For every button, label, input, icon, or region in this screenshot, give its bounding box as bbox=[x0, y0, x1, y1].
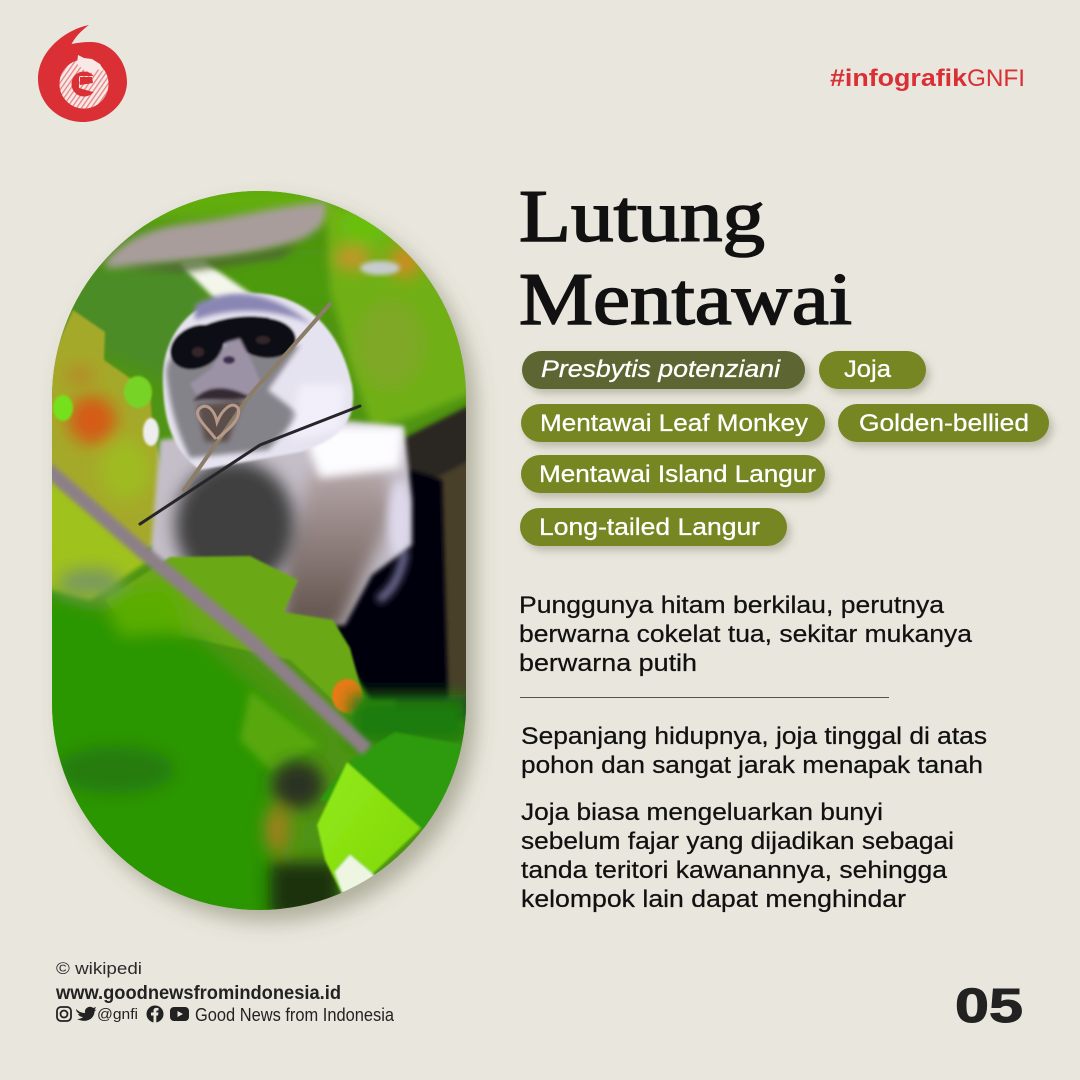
pill: scientific name bbox=[522, 351, 805, 389]
bright leaf bbox=[317, 762, 421, 900]
page number: 05 bbox=[955, 980, 1023, 1033]
photo credit: © wikipedi bbox=[56, 959, 142, 978]
description paragraph 3: kelompok lain dapat menghindar bbox=[521, 886, 906, 913]
monkey head bbox=[163, 293, 353, 470]
icon: facebook bbox=[146, 1006, 164, 1023]
photo background foliage bbox=[63, 191, 379, 392]
right dark trunk bbox=[395, 405, 470, 720]
pill: Joja bbox=[819, 351, 926, 389]
thin twigs bbox=[140, 304, 360, 524]
icon: youtube bbox=[170, 1007, 189, 1021]
white streak bbox=[180, 262, 254, 306]
pill: Mentawai Island Langur: Mentawai Island Langur bbox=[539, 461, 816, 488]
pill: scientific name: Presbytis potenziani bbox=[541, 356, 781, 383]
social name: Good News from Indonesia bbox=[195, 1005, 395, 1025]
photo: monkey in leaves bbox=[40, 180, 475, 920]
social row bbox=[57, 1005, 395, 1025]
description paragraph 2 bbox=[521, 723, 987, 779]
description paragraph 1: berwarna putih bbox=[519, 650, 697, 677]
pill: Joja: Joja bbox=[844, 356, 892, 383]
top branch bbox=[104, 202, 328, 268]
description paragraph 3: tanda teritori kawanannya, sehingga bbox=[521, 857, 948, 884]
title bbox=[519, 176, 852, 341]
pill: Mentawai Leaf Monkey bbox=[521, 404, 825, 442]
logo bbox=[38, 25, 127, 122]
pill: Golden-bellied bbox=[838, 404, 1049, 442]
hashtag: #infografik bbox=[830, 65, 968, 92]
description paragraph 3 bbox=[521, 799, 954, 913]
description paragraph 3: Joja biasa mengeluarkan bunyi bbox=[521, 799, 883, 826]
tag pills bbox=[520, 351, 1049, 546]
pill: Golden-bellied: Golden-bellied bbox=[859, 410, 1029, 437]
pill: Long-tailed Langur: Long-tailed Langur bbox=[539, 514, 760, 541]
diagonal branch bbox=[46, 468, 367, 750]
pill: Long-tailed Langur bbox=[520, 508, 787, 546]
lower right foliage bbox=[265, 695, 470, 920]
description paragraph 1: berwarna cokelat tua, sekitar mukanya bbox=[519, 621, 973, 648]
website: www.goodnewsfromindonesia.id bbox=[55, 983, 341, 1004]
title: Lutung bbox=[519, 176, 765, 258]
description paragraph 1: Punggunya hitam berkilau, perutnya bbox=[519, 592, 945, 619]
icon: instagram bbox=[57, 1007, 71, 1021]
description paragraph 2: pohon dan sangat jarak menapak tanah bbox=[521, 752, 983, 779]
description paragraph 3: sebelum fajar yang dijadikan sebagai bbox=[521, 828, 954, 855]
hashtag bbox=[830, 65, 1025, 92]
icon: twitter bbox=[76, 1007, 96, 1021]
lower notched leaf bbox=[105, 556, 366, 716]
pill: Mentawai Leaf Monkey: Mentawai Leaf Monkey bbox=[540, 410, 808, 437]
description paragraph 1 bbox=[519, 592, 973, 677]
pill: Mentawai Island Langur bbox=[521, 455, 825, 493]
handle: @gnfi bbox=[97, 1006, 138, 1023]
description paragraph 2: Sepanjang hidupnya, joja tinggal di atas bbox=[521, 723, 987, 750]
foreground left foliage bbox=[40, 568, 320, 920]
hashtag: GNFI bbox=[967, 65, 1025, 92]
right leaf bbox=[326, 205, 475, 430]
monkey body bbox=[140, 415, 420, 635]
title: Mentawai bbox=[519, 259, 852, 341]
left leaf bbox=[48, 310, 162, 560]
